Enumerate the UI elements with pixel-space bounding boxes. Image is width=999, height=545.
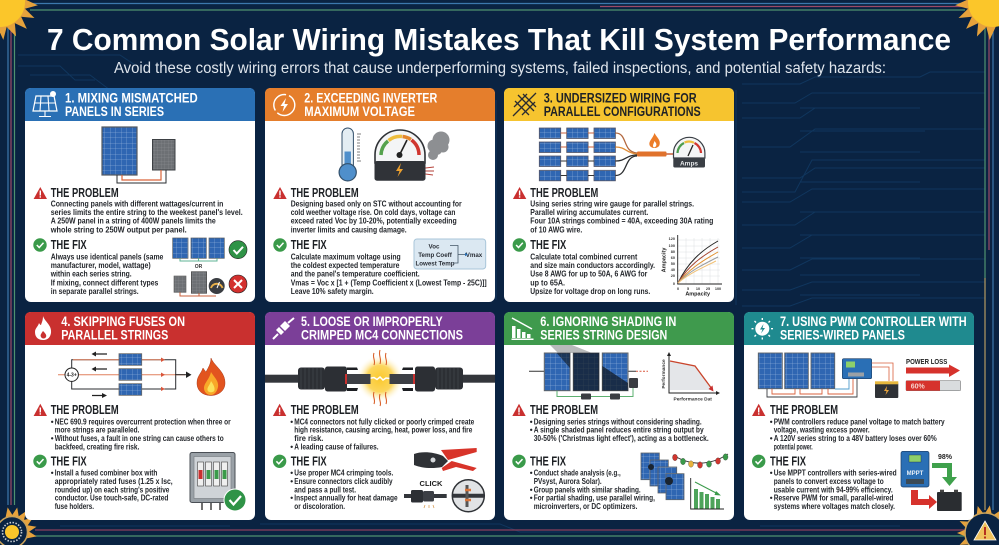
text: the fix: • [290, 477, 293, 486]
header: mistake 5 [265, 312, 495, 345]
callout: power loss 60 percent: 60% [911, 383, 925, 390]
diagram: vmax formula: Voc [429, 244, 440, 250]
icon: fix check [752, 455, 765, 468]
text: the problem: THE PROBLEM [530, 186, 598, 200]
chart: ampacity curves: 5 [687, 287, 689, 291]
text: the fix: conductor. Use touch-safe, DC-rated [55, 494, 168, 503]
header: mistake 7: SERIES-WIRED PANELS [780, 328, 905, 342]
text: the problem: A 250W panel in a string of 400W panels limits the [51, 217, 216, 226]
text: the fix [530, 454, 655, 511]
icon: fix check [33, 238, 47, 252]
text: the fix: Ensure connectors click audibly [294, 477, 393, 486]
chart: declining output bars [691, 478, 724, 509]
text: the problem: more strings are paralleled. [55, 426, 139, 435]
text: the problem: whole string to 250W output per panel. [50, 225, 187, 234]
text: the fix: • [290, 469, 293, 478]
text: the fix: • [530, 494, 533, 503]
icon: top-right sun [955, 0, 999, 40]
icon: fix check [513, 238, 526, 252]
text: the fix: appropriately rated fuses (1.25 x Isc, [55, 477, 173, 486]
icon: fix check [273, 455, 286, 468]
header: mistake 7 [744, 312, 974, 345]
text: the problem: THE PROBLEM [51, 186, 119, 200]
diagram: vmax formula [414, 239, 486, 269]
icon: declining bars [512, 318, 534, 340]
panel: mistake 3 undersized wiring [504, 88, 734, 302]
text: the problem [291, 186, 462, 234]
icon: solar panel with sun [33, 91, 57, 116]
header: mistake 6: SERIES STRING DESIGN [540, 328, 667, 342]
text: the fix: the coldest expected temperature [291, 261, 400, 270]
text: the fix [50, 238, 164, 296]
illustration: crimping tool [414, 448, 477, 471]
text: the fix: Use proper MC4 crimping tools. [294, 469, 393, 478]
diagram: vmax formula: Lowest Temp [415, 260, 455, 267]
illustration: overheating mc4 connector [265, 350, 495, 406]
text: the problem: PWM controllers reduce panel voltage to match battery [774, 417, 945, 426]
text: the problem [50, 186, 243, 234]
text: the fix: and pass a pull test. [294, 485, 356, 494]
text: the fix: THE FIX [770, 454, 806, 468]
header: mistake 5: 5. LOOSE OR IMPROPERLY [301, 314, 443, 329]
header: mistake 3: PARALLEL CONFIGURATIONS [544, 104, 701, 119]
illustration: stacked shaded panels [641, 453, 684, 500]
text: the fix: PVsyst, Aurora Solar). [534, 477, 602, 486]
text: the problem: THE PROBLEM [291, 186, 359, 200]
text: the fix: Conduct shade analysis (e.g., [534, 469, 621, 478]
diagram: parallel strings without fuses [58, 352, 192, 398]
text: the fix: • [770, 469, 773, 478]
panel: mistake 5 loose mc4 connections [265, 312, 495, 520]
text: the fix: Install a fused combiner box with [55, 469, 157, 478]
text: the fix [530, 238, 655, 296]
icon: problem warning [273, 187, 287, 199]
text: the problem: Using series string wire gauge for parallel strings. [530, 200, 694, 209]
callout: power loss 60 percent: POWER LOSS [906, 357, 947, 366]
text: the problem [530, 186, 713, 234]
illustration: click connector and contact: CLICK [420, 479, 443, 488]
panel: mistake 4 skipping fuses [25, 312, 255, 520]
text: the problem: • [530, 417, 533, 426]
text: the fix: THE FIX [530, 238, 567, 252]
diagram: vmax formula: Temp Coeff [418, 252, 453, 259]
text: the fix: and the panel's temperature coefficient. [291, 270, 420, 279]
text: the fix: Use MPPT controllers with series-wired [774, 469, 897, 478]
chart: ampacity curves: 100 [715, 287, 721, 291]
illustration: parallel strings to undersized wire [539, 128, 674, 181]
text: the fix: systems where voltages match closely. [774, 502, 895, 511]
text: the fix: usable current with 94-99% efficiency. [774, 485, 893, 494]
text: the problem: THE PROBLEM [770, 403, 838, 417]
text: the problem: Parallel wiring accumulates current. [530, 208, 648, 217]
text: the problem: MC4 connectors not fully clicked or poorly crimped create [294, 417, 475, 426]
text: the problem: • [290, 442, 293, 451]
text: the fix: THE FIX [291, 454, 327, 468]
icon: fix check [512, 455, 526, 468]
illustration: smoke [428, 132, 450, 160]
text: the problem: 30-50% ('Christmas light effect'), acting as a bottleneck. [534, 434, 709, 443]
text: the problem: • [51, 417, 54, 426]
text: the problem: Designing based only on STC without accounting for [291, 200, 462, 209]
illustration: mppt controller to battery: MPPT [907, 471, 924, 477]
chart: ampacity curves: 100 [669, 244, 675, 248]
text: the fix: fuse holders. [55, 502, 94, 511]
illustration: pwm wiring [758, 353, 898, 398]
text: the fix [290, 454, 398, 511]
chart: performance drop: Performance [661, 359, 667, 389]
illustration: mppt controller to battery [901, 451, 962, 511]
panel: mistake 2 exceeding inverter voltage [265, 88, 495, 302]
icon: fix check [33, 455, 47, 468]
text: the fix: Leave 10% safety margin. [291, 287, 374, 296]
text: the problem: exceed rated Voc by 10-20%, potentially exceeding [291, 217, 457, 226]
text: the problem: backfeed, creating fire risk. [55, 442, 139, 451]
chart: ampacity curves: 120 [669, 237, 675, 241]
header: mistake 3: 3. UNDERSIZED WIRING FOR [544, 90, 697, 106]
icon: voltage circle [274, 94, 295, 116]
text: the problem: THE PROBLEM [51, 403, 119, 417]
diagram: vmax formula: Vmax [466, 252, 483, 259]
chart: ampacity curves: 0 [673, 282, 675, 286]
text: the problem: THE PROBLEM [530, 403, 598, 417]
subtitle: Avoid these costly wiring errors that cause underperforming systems, failed inspections, and potential safety hazards: [114, 60, 886, 77]
header: mistake 2: 2. EXCEEDING INVERTER [304, 90, 437, 106]
icon: fire [197, 358, 225, 396]
header: mistake 1: PANELS IN SERIES [65, 104, 164, 119]
text: the problem: THE PROBLEM [291, 403, 359, 417]
icon: problem warning [34, 404, 47, 416]
text: the fix: within each series string. [50, 270, 132, 279]
icon: problem warning [273, 404, 286, 416]
text: the problem [290, 403, 475, 451]
text: the problem [770, 403, 945, 451]
text: the fix: and size main conductors accordingly. [530, 261, 655, 270]
text: the problem: Four 10A strings combined = 40A, exceeding 30A rating [530, 217, 713, 226]
chart: ampacity curves: 60 [671, 256, 675, 260]
text: the fix: microinverters, or DC optimizers. [534, 502, 637, 511]
text: the fix: manufacturer, model, wattage) [51, 261, 151, 270]
text: the fix: THE FIX [291, 238, 327, 252]
text: the fix: Calculate total combined current [530, 252, 638, 261]
text: the fix: THE FIX [51, 238, 87, 252]
illustration: shaded panel string [529, 345, 648, 400]
icon: bottom-left gear sun [0, 507, 37, 545]
text: the fix: For partial shading, use parallel wiring, [534, 494, 655, 503]
text: the fix: Vmas = Voc x [1 + (Temp Coefficient x (Lowest Temp - 25C)]] [291, 278, 487, 287]
illustration: correct matching vs mixed panels [173, 238, 247, 296]
illustration: mppt controller to battery: 98% [938, 454, 953, 461]
panel: mistake 6 ignoring shading [504, 312, 734, 520]
icon: problem warning [752, 404, 765, 416]
text: the problem: Designing series strings without considering shading. [534, 417, 702, 426]
text: the fix: • [530, 485, 533, 494]
chart: ampacity curves: 0 [677, 287, 679, 291]
icon: flame [35, 316, 51, 340]
text: the problem: A single shaded panel reduces entire string output by [534, 426, 704, 435]
text: the problem: Connecting panels with different wattages/current in [51, 200, 223, 209]
text: the fix: THE FIX [51, 454, 87, 468]
text: the fix: THE FIX [530, 454, 566, 468]
text: the problem: A leading cause of failures. [294, 442, 379, 451]
text: the fix: Inspect annually for heat damage [294, 494, 398, 503]
icon: mc4 connector [273, 318, 294, 339]
chart: ampacity curves: 20 [671, 274, 675, 278]
text: the problem: high resistance, causing arcing, heat, power loss, and fire [294, 426, 473, 435]
chart: ampacity curves: 10 [696, 287, 700, 291]
chart: ampacity curves: 50 [671, 262, 675, 266]
text: the problem: voltage, wasting excess power. [774, 426, 870, 435]
text: the problem: cold weether voltage rise. On cold days, voltage can [291, 208, 455, 217]
illustration: christmas lights [672, 454, 728, 468]
text: the problem: series limits the entire string to the weekest panel's level. [51, 208, 243, 217]
icon: problem warning [513, 187, 526, 199]
text: the fix: If mixing, connect different types [51, 278, 159, 287]
header: mistake 2: MAXIMUM VOLTAGE [304, 104, 415, 119]
diagram: parallel strings without fuses: 4-3+ [67, 373, 77, 379]
text: the problem: NEC 690.9 requires overcurrent protection when three or [55, 417, 231, 426]
icon: sun bolt [752, 318, 773, 340]
illustration: thermometer [339, 128, 361, 181]
illustration: click connector and contact [404, 479, 484, 512]
header: mistake 3 [504, 88, 734, 121]
header: mistake 4: 4. SKIPPING FUSES ON [61, 314, 185, 329]
illustration: fused combiner box [190, 452, 246, 511]
text: the fix: rounded up) on each string's positive [55, 485, 170, 494]
header: mistake 4: PARALLEL STRINGS [61, 328, 168, 342]
text: the fix: Calculate maximum voltage using [291, 252, 401, 261]
text: the fix: • [290, 494, 293, 503]
text: the fix: • [530, 469, 533, 478]
header: mistake 6: 6. IGNORING SHADING IN [540, 314, 676, 329]
chart: ampacity curves: 40 [671, 268, 675, 272]
text: the fix: Group panels with similar shading. [534, 485, 641, 494]
text: the fix: Reserve PWM for small, parallel-wired [774, 494, 893, 503]
icon: problem warning [512, 404, 526, 416]
icon: problem warning [34, 187, 47, 199]
header: mistake 1 [25, 88, 255, 121]
text: the problem: • [290, 417, 293, 426]
text: the problem [51, 403, 231, 451]
icon: wire mesh [513, 93, 536, 116]
text: the problem: • [51, 434, 54, 443]
header: mistake 6 [504, 312, 734, 345]
text: the fix: in separate parallel strings. [51, 287, 139, 296]
text: the fix: up to 65A. [530, 278, 565, 287]
illustration: amps gauge: Amps [680, 161, 698, 168]
text: the problem: • [770, 434, 773, 443]
chart: ampacity curves: 25 [706, 287, 710, 291]
text: the problem: A 120V series string to a 48V battery loses over 60% [774, 434, 937, 443]
chart: ampacity curves: 80 [671, 250, 675, 254]
chart: ampacity curves: Ampacity [685, 292, 711, 298]
text: the fix [770, 454, 897, 511]
icon: bottom-right warning gear [957, 505, 999, 545]
text: the fix [51, 454, 173, 511]
text: the fix [291, 238, 487, 296]
title: 7 Common Solar Wiring Mistakes That Kill System Performance [47, 22, 951, 57]
header: mistake 4 [25, 312, 255, 345]
header: mistake 2 [265, 88, 495, 121]
text: the fix: Always use identical panels (same [51, 252, 164, 261]
chart: performance drop: Performance Dat [674, 396, 712, 402]
icon: fix check [273, 238, 287, 252]
chart: performance drop [661, 352, 720, 402]
panel: mistake 7 pwm controller [744, 312, 974, 520]
callout: power loss 60 percent [906, 357, 961, 391]
chart: ampacity curves: Ampacity [662, 247, 668, 272]
chart: ampacity curves [662, 235, 722, 298]
text: the problem: • [530, 426, 533, 435]
text: the fix: panels to convert excess voltage to [774, 477, 884, 486]
text: the fix: Upsize for voltage drop on long runs. [530, 287, 650, 296]
text: the problem: Without fuses, a fault in one string can cause others to [55, 434, 224, 443]
header: mistake 5: CRIMPED MC4 CONNECTIONS [301, 328, 463, 342]
illustration: overvoltage gauge on inverter [374, 130, 434, 181]
text: the problem [530, 403, 709, 443]
illustration: correct matching vs mixed panels: OR [195, 264, 203, 270]
text: the problem: fire risk. [294, 434, 323, 443]
text: the problem: • [770, 417, 773, 426]
illustration: amps gauge [673, 137, 705, 168]
icon: top-left sun [0, 0, 38, 40]
text: the fix: or discoloration. [294, 502, 345, 511]
text: the problem: inverter limits and causing damage. [291, 225, 407, 234]
panel: mistake 1 mixing mismatched panels [25, 88, 255, 302]
text: the problem: of 10 AWG wire. [530, 225, 582, 234]
header: mistake 1: 1. MIXING MISMATCHED [65, 90, 198, 106]
text: the fix: • [770, 494, 773, 503]
illustration: mismatched panels [102, 127, 175, 183]
text: the problem: potential power. [774, 442, 813, 451]
text: the fix: Use 8 AWG for up to 50A, 6 AWG for [530, 270, 648, 279]
text: the fix: • [51, 469, 54, 478]
